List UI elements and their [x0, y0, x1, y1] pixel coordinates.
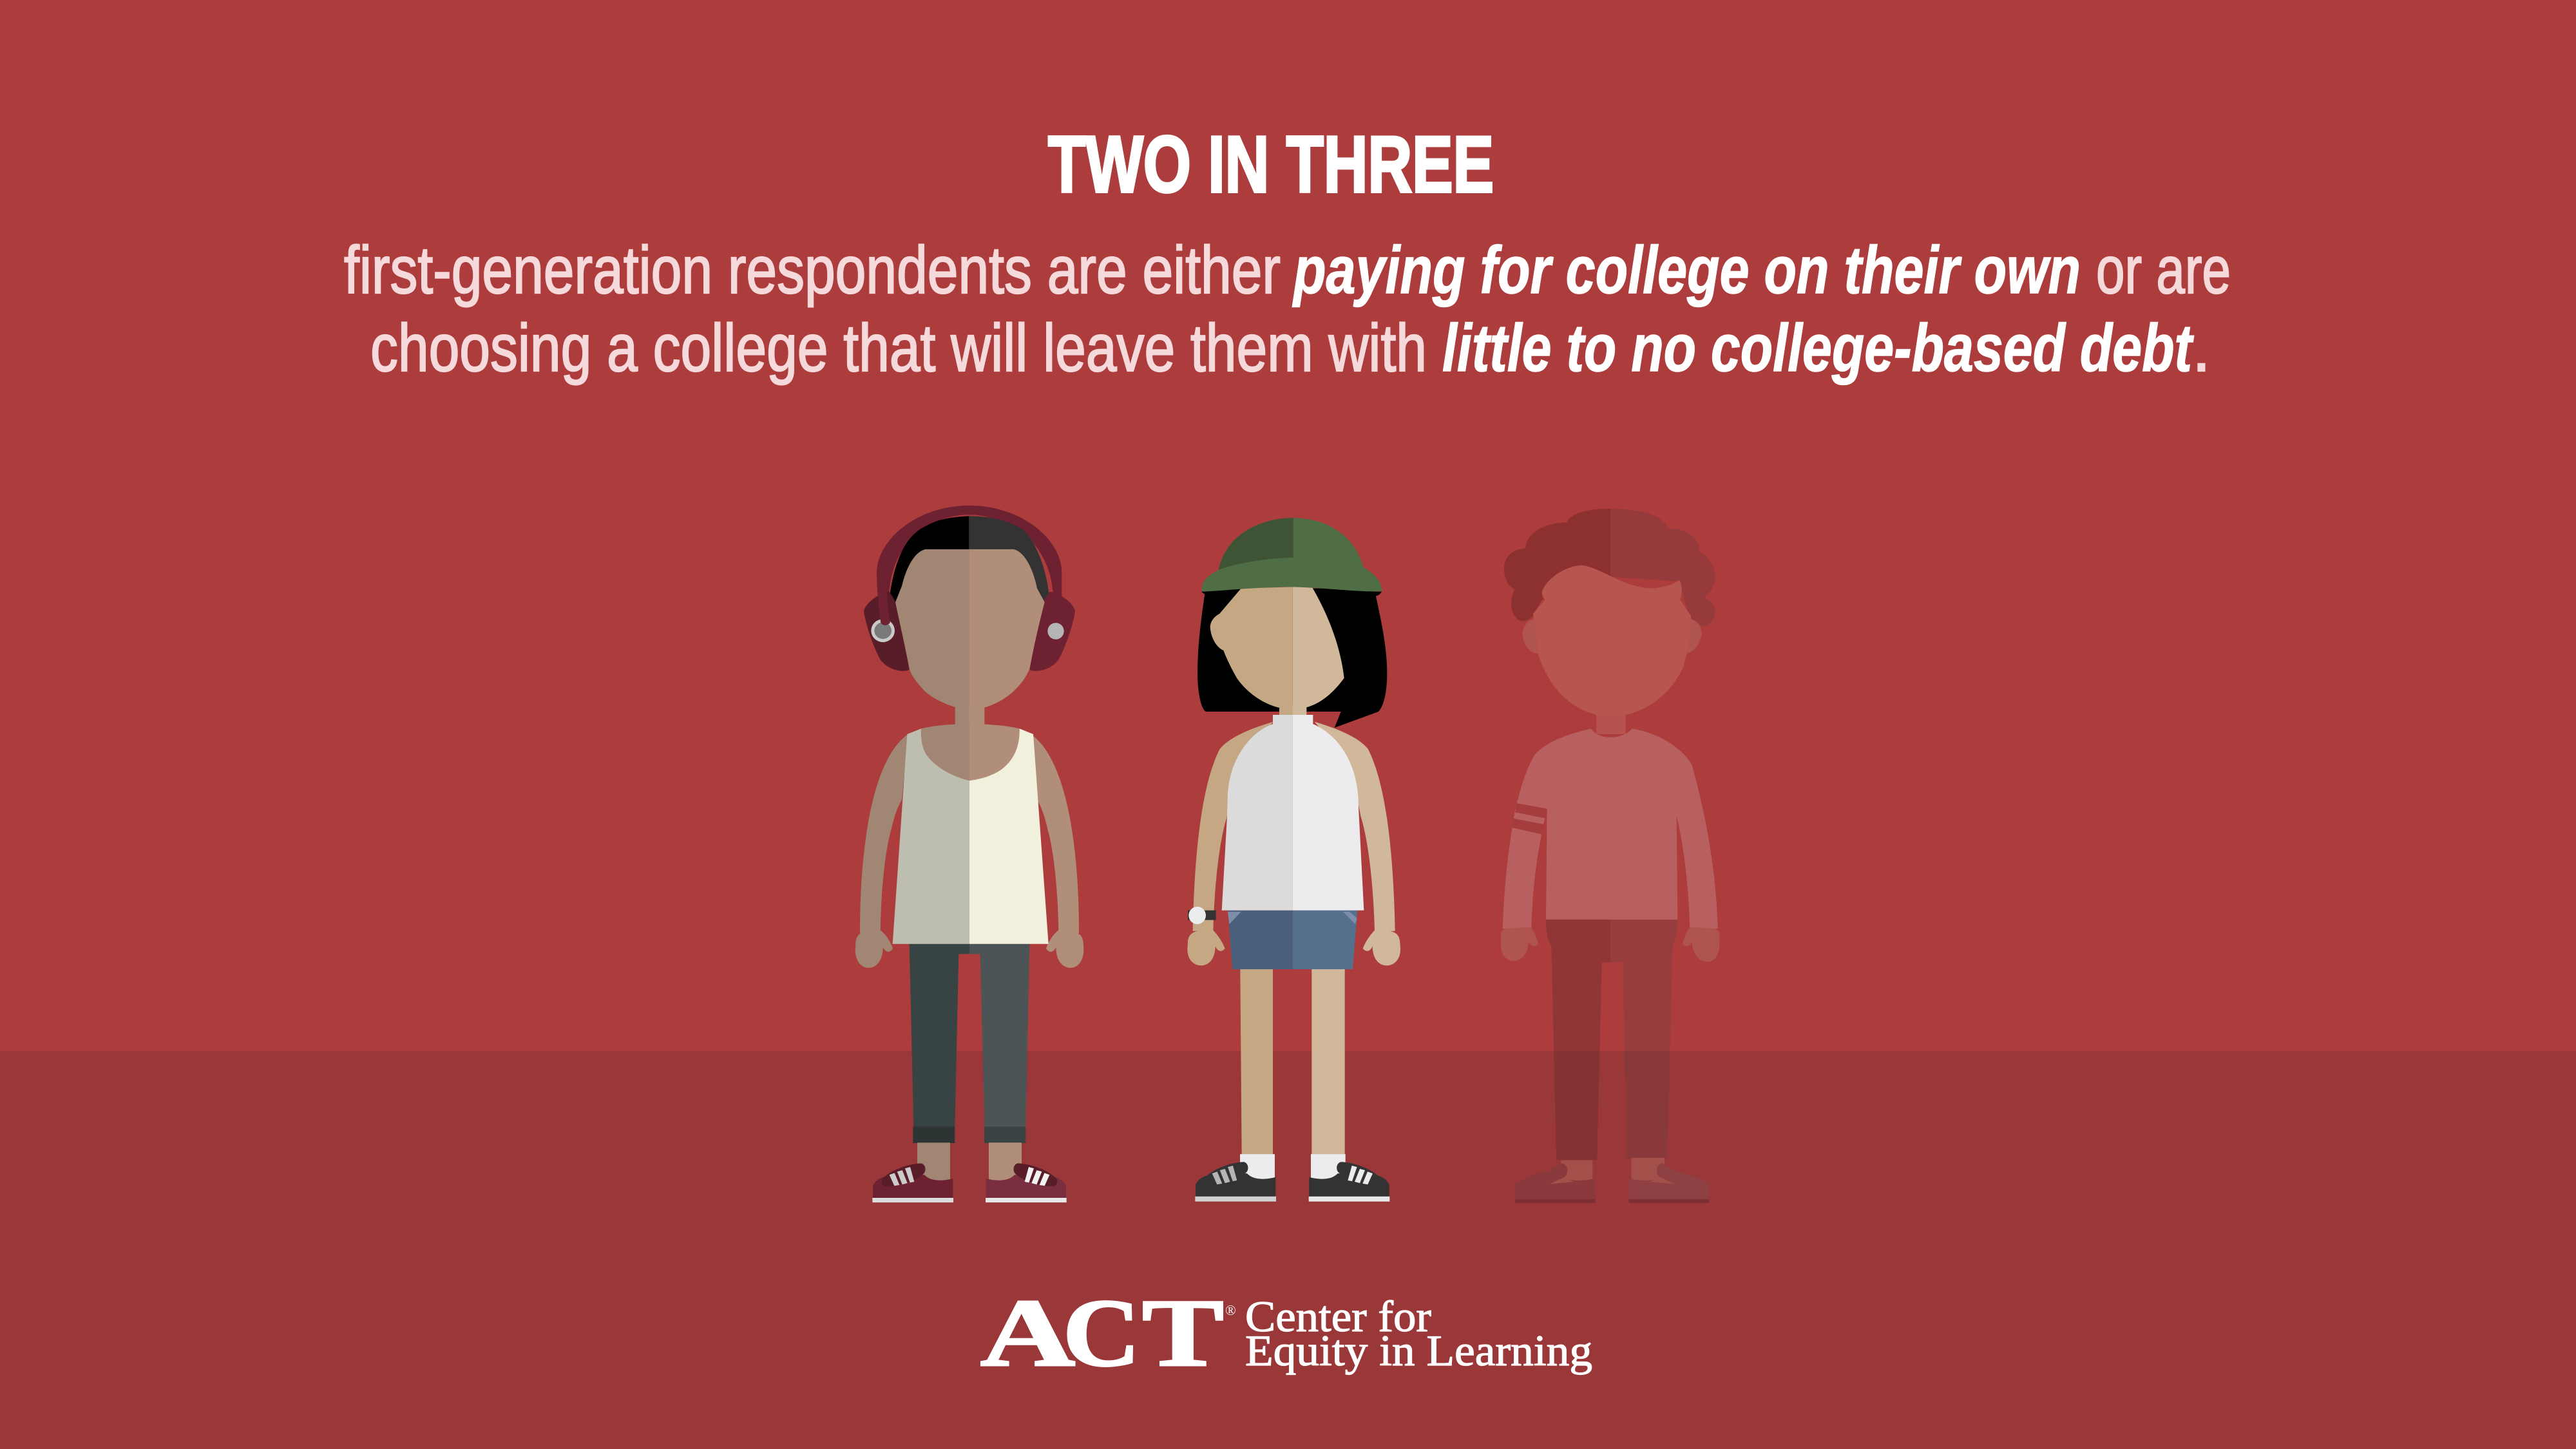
arms and hands [1187, 722, 1400, 965]
registered mark: ® [1225, 1302, 1236, 1318]
legs [1240, 969, 1345, 1157]
arms and hands [855, 734, 1083, 968]
description text: little to no college-based debt [1442, 311, 2194, 386]
figure: student with headphones [855, 506, 1083, 1202]
white top [1222, 715, 1364, 911]
background wall [0, 0, 2576, 1051]
figure: student with green hat [1187, 518, 1400, 1202]
left shoe [1195, 1162, 1276, 1202]
description text: choosing a college that will leave them with [370, 311, 1427, 386]
head [1533, 565, 1691, 717]
head [1210, 587, 1344, 709]
hat [1201, 518, 1382, 596]
headband [877, 506, 1062, 623]
hands [1501, 927, 1719, 962]
floor band [0, 1051, 2576, 1449]
description text: paying for college on their own [1292, 233, 2081, 308]
left shoe [872, 1163, 953, 1202]
description text: or are [2096, 233, 2231, 308]
pants [910, 944, 1029, 1143]
ankles [917, 1142, 1022, 1182]
sleeve stripes [1512, 803, 1547, 835]
neck [1596, 715, 1625, 734]
skirt [1228, 911, 1357, 969]
ACT wordmark: A [980, 1280, 1075, 1387]
chest [921, 724, 1020, 781]
figure: faded student with curly hair [1501, 509, 1719, 1203]
head [895, 549, 1045, 710]
neck [955, 706, 984, 728]
ankles [1561, 1158, 1665, 1181]
title: TWO IN THREE [1048, 120, 1494, 209]
sweater [1503, 728, 1718, 929]
ACT wordmark [980, 1280, 1224, 1387]
logo: ACT Center for Equity in Learning [980, 1280, 1592, 1387]
tank top [893, 728, 1049, 944]
curly hair [1504, 509, 1715, 627]
socks [1240, 1154, 1346, 1182]
description text: . [2192, 311, 2211, 386]
ACT wordmark: C [1063, 1280, 1140, 1387]
right loafer [1629, 1163, 1709, 1203]
logo tagline [1245, 1292, 1592, 1375]
ears [1522, 618, 1702, 654]
ACT wordmark: T [1142, 1280, 1224, 1387]
logo tagline: Center for [1245, 1292, 1431, 1341]
hair [890, 516, 1049, 602]
trousers [1546, 920, 1677, 1160]
right shoe [1309, 1162, 1389, 1202]
description text: first-generation respondents are either [344, 233, 1281, 308]
ear cups [864, 582, 1075, 671]
neck [1279, 706, 1306, 717]
right shoe [986, 1163, 1067, 1202]
left loafer [1515, 1163, 1596, 1203]
hair [1197, 589, 1387, 728]
logo tagline: Equity in Learning [1245, 1326, 1592, 1375]
watch [1188, 907, 1216, 924]
description text [344, 233, 2231, 386]
